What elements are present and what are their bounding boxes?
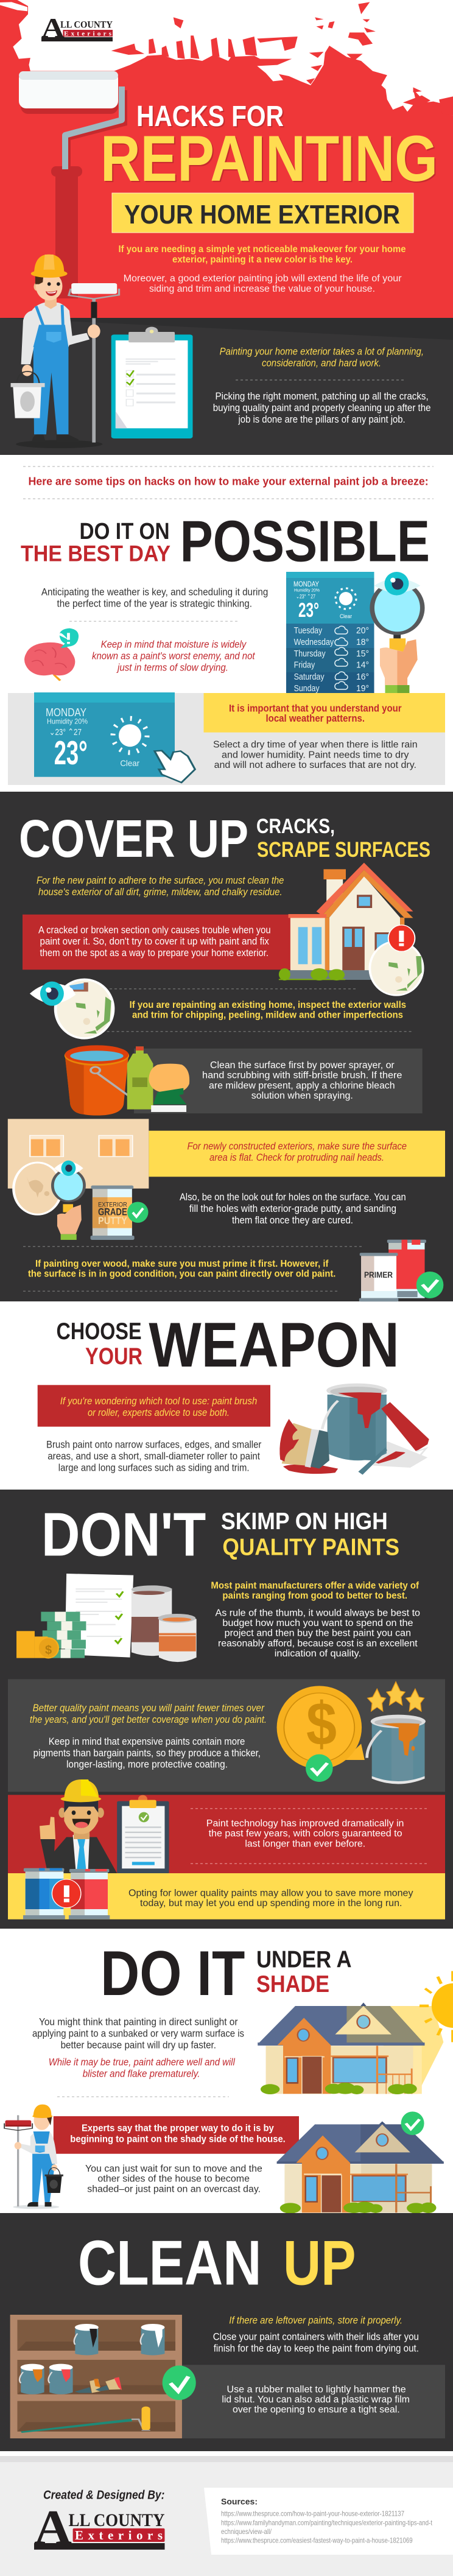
intro text [118, 244, 406, 294]
panel: lower quality [8, 1868, 445, 1920]
leftover text [213, 2315, 419, 2354]
moisture callout [92, 639, 256, 674]
logo: All County Exteriors [41, 12, 113, 43]
sources: https://www.thespruce.com/how-to-paint-your-house-exterior-1821137 [221, 2510, 404, 2518]
sources: https://www.thespruce.com/easiest-fastest-way-to-paint-a-house-1821069 [221, 2536, 413, 2544]
manager with clipboard [40, 1779, 169, 1874]
moisture callout: known as a paint's worst enemy, and not [92, 650, 256, 661]
title: HACKS FOR [136, 100, 284, 133]
clean text: For the new paint to adhere to the surface, you must clean the [37, 875, 284, 886]
holes text: fill the holes with exterior-grade putty, and sanding [189, 1203, 396, 1214]
heading: do it under a shade: SHADE [256, 1971, 329, 1997]
weather app card: 16° [356, 672, 369, 682]
logo large: LL COUNTY [68, 2510, 165, 2530]
holes text: them flat once they are cured. [232, 1215, 353, 1226]
cleaning supplies [65, 1045, 189, 1116]
weather app card: 23° [298, 599, 319, 621]
red callout: shady side: Experts say that the proper way to do it is by [82, 2123, 274, 2133]
shady text [85, 2164, 262, 2194]
yellow callout: new exteriors: For newly constructed exteriors, make sure the surface [188, 1141, 407, 1152]
intro text: Moreover, a good exterior painting job will extend the life of your [124, 273, 402, 284]
logo: All County Exteriors: LL COUNTY [60, 20, 113, 30]
weather app card: 19° [356, 683, 369, 694]
panel: better quality: Better quality paint means you will paint fewer times over [33, 1703, 265, 1714]
planning text: consideration, and hard work. [262, 357, 381, 369]
brush text: Brush paint onto narrow surfaces, edges, and smaller [46, 1440, 262, 1451]
created by: Created & Designed By: [43, 2488, 164, 2502]
putty can label: EXTERIOR [98, 1202, 127, 1209]
weather card large: 23° [54, 734, 88, 772]
paint storage shelf [10, 2315, 196, 2438]
panel: mallet [182, 2365, 445, 2438]
callout: local weather: It is important that you understand your [229, 703, 402, 714]
heading: choose your weapon [56, 1310, 399, 1381]
red callout: cracked section: A cracked or broken section only causes trouble when you [38, 924, 271, 935]
red callout: shady side [54, 2116, 299, 2154]
logo large: A [34, 2501, 72, 2555]
panel: clean surface: hand scrubbing with stiff-bristle brush. If there [202, 1071, 402, 1081]
eye with wall detail [30, 979, 113, 1038]
moisture callout: just in terms of slow drying. [116, 663, 228, 674]
paint can, brush and roller [279, 1384, 429, 1475]
yellow callout: new exteriors [149, 1131, 445, 1177]
heading: don't skimp: QUALITY PAINTS [222, 1534, 399, 1560]
planning text [213, 346, 431, 425]
weather card large: MONDAY [46, 706, 86, 719]
weather app card: 18° [356, 637, 369, 647]
brush text: large and long surfaces such as siding and trim. [58, 1463, 250, 1474]
panel: weather patterns [8, 692, 445, 785]
sunlight text: blister and flake prematurely. [83, 2068, 200, 2079]
dry time text: and lower humidity. Paint needs time to dry [222, 750, 409, 760]
weather app card: Sunday [294, 683, 320, 694]
red callout: cracked section [23, 915, 290, 970]
white paint strokes [0, 0, 453, 116]
panel: better quality: the years, and you'll get better coverage when you do paint. [30, 1714, 267, 1725]
heading: do it under a shade [100, 1938, 352, 2009]
wall with putty [8, 1119, 149, 1240]
leftover text: If there are leftover paints, store it properly. [229, 2315, 402, 2326]
panel: lower quality: today, but may let you end up spending more in the long run. [140, 1898, 402, 1909]
section: don't skimp: $ [45, 1644, 52, 1657]
heading: cover up cracks: COVER UP [19, 809, 248, 868]
primer text: the surface is in in good condition, you can paint directly over old paint. [28, 1269, 335, 1279]
weather app card: Clear [340, 613, 352, 620]
planning text: job is done are the pillars of any paint job. [238, 413, 406, 425]
paints variety text: As rule of the thumb, it would always be best to [216, 1608, 420, 1618]
panel: paint technology: last longer than ever before. [245, 1839, 365, 1849]
weather app card: 14° [356, 660, 369, 670]
paints variety text: project and then buy the best paint you can [225, 1628, 411, 1639]
dry time text: and will not adhere to surfaces that are not dry. [214, 760, 416, 770]
putty can label [98, 1202, 127, 1226]
panel: better quality: Keep in mind that expensive paints contain more [49, 1736, 245, 1747]
panel: better quality: longer-lasting, more protective coating. [66, 1759, 228, 1770]
footer [0, 2456, 453, 2576]
panel: clean surface: are mildew present, apply a chlorine bleach [209, 1080, 395, 1091]
heading: do it under a shade: DO IT [100, 1938, 245, 2009]
heading: cover up cracks: CRACKS, [256, 815, 335, 838]
putty can label: GRADE [98, 1206, 127, 1218]
icon: pointer hand [155, 751, 195, 783]
sources: echniques/view-all/ [221, 2527, 272, 2536]
heading: don't skimp [41, 1501, 399, 1569]
red callout: shady side: beginning to paint on the shady side of the house. [70, 2134, 286, 2145]
leftover text: finish for the day to keep the paint from drying out. [214, 2343, 419, 2354]
planning text: buying quality paint and properly cleaning up after the [213, 402, 431, 413]
putty can label: PUTTY [98, 1215, 127, 1226]
weather card large [34, 692, 175, 777]
paint roller [19, 71, 124, 298]
panel: mallet: Use a rubber mallet to lightly hammer the [226, 2384, 406, 2395]
icon: brain [24, 628, 79, 681]
paints variety text: paints ranging from good to better to best. [222, 1591, 407, 1601]
intro text: If you are needing a simple yet noticeable makeover for your home [118, 244, 406, 255]
red callout: which tool: If you're wondering which tool to use: paint brush [60, 1396, 257, 1407]
paints variety text: Most paint manufacturers offer a wide variety of [211, 1580, 420, 1591]
heading: don't skimp: DON'T [41, 1501, 206, 1569]
heading: clean up: CLEAN [78, 2228, 261, 2299]
magnifying glass with eye [372, 572, 423, 694]
panel: clean surface: solution when spraying. [251, 1091, 353, 1101]
moisture callout: Keep in mind that moisture is widely [101, 639, 247, 650]
weather app card: Friday [294, 660, 315, 670]
holes text [180, 1192, 406, 1226]
weather app card: Tuesday [294, 625, 323, 636]
paints variety text: indication of quality. [275, 1649, 361, 1659]
weather app card: ⌄23° ⌃27 [296, 594, 315, 600]
blue and red cans with alert [23, 1868, 110, 1920]
sunlight text: While it may be true, paint adhere well and will [49, 2057, 236, 2067]
holes text: Also, be on the look out for holes on the surface. You can [180, 1192, 406, 1203]
heading: do it on the best day possible: THE BEST DAY [21, 541, 170, 566]
callout: local weather: local weather patterns. [265, 713, 365, 724]
sunlit house [258, 1971, 453, 2094]
planning text: Painting your home exterior takes a lot of planning, [220, 346, 424, 357]
paints variety text [211, 1580, 420, 1659]
shady text: other sides of the house to become [97, 2174, 250, 2184]
sunlight text: better because paint will dry up faster. [61, 2040, 216, 2051]
sunlight text: You might think that painting in direct sunlight or [39, 2017, 238, 2028]
section: don't skimp [0, 1490, 453, 1929]
heading: don't skimp: SKIMP ON HIGH [221, 1508, 388, 1535]
panel: mallet: over the opening to ensure a tight seal. [233, 2405, 400, 2415]
logo large: Exteriors [75, 2528, 163, 2543]
house illustration [279, 863, 413, 980]
heading: choose your weapon: YOUR [85, 1343, 142, 1370]
heading: choose your weapon: WEAPON [149, 1310, 399, 1381]
section: clean up [0, 2213, 453, 2451]
hero panel [0, 0, 453, 318]
heading: cover up cracks [19, 809, 430, 868]
panel: clean surface [134, 1049, 423, 1113]
tips intro: Here are some tips on hacks on how to make your external paint job a breeze: [28, 476, 429, 488]
intro dark panel [0, 255, 453, 455]
gold coin with stars and check [277, 1682, 424, 1782]
brush text [46, 1440, 262, 1474]
title: YOUR HOME EXTERIOR [124, 200, 400, 230]
panel: paint technology: the past few years, with colors guaranteed to [209, 1829, 402, 1839]
weather app card: MONDAY [293, 580, 319, 588]
shady text: shaded–or just paint on an overcast day. [87, 2184, 261, 2194]
heading: clean up: UP [283, 2228, 356, 2299]
panel: lower quality: Opting for lower quality paints may allow you to save more money [128, 1888, 413, 1898]
panel: paint technology: Paint technology has improved dramatically in [206, 1818, 404, 1829]
weather text [41, 587, 268, 621]
clipboard [111, 327, 192, 438]
weather text: Anticipating the weather is key, and scheduling it during [41, 587, 268, 598]
paints variety text: budget how much you want to spend on the [222, 1618, 413, 1628]
logo: All County Exteriors: A [41, 12, 65, 43]
panel: better quality: $ [306, 1690, 337, 1758]
leftover text: Close your paint containers with their lids after you [213, 2331, 419, 2342]
inspect text [130, 1000, 406, 1021]
weather card large: ⌄23° ⌃27 [49, 727, 82, 737]
weather app card: Thursday [294, 649, 326, 659]
shaded house [277, 2111, 444, 2214]
yellow callout: new exteriors: area is flat. Check for protruding nail heads. [209, 1152, 384, 1163]
clean text [37, 875, 284, 898]
shady text: You can just wait for sun to move and the [85, 2164, 262, 2174]
red callout: cracked section: them on the spot as a way to prepare your home exterior. [40, 948, 269, 959]
section: cover up [0, 792, 453, 1301]
panel: clean surface: Clean the surface first by power sprayer, or [210, 1060, 395, 1071]
red callout: cracked section: paint over it. So, don't try to cover it up with paint and fix [40, 936, 269, 947]
panel: mallet: lid shut. You can also add a plastic wrap film [222, 2395, 410, 2405]
intro text: exterior, painting it a new color is the key. [172, 255, 353, 265]
weather app card [286, 572, 374, 694]
heading: do it on the best day possible [21, 509, 430, 574]
heading: choose your weapon: CHOOSE [56, 1318, 141, 1345]
red callout: which tool: or roller, experts advice to use both. [88, 1407, 230, 1418]
primer text: If painting over wood, make sure you must prime it first. However, if [35, 1259, 329, 1269]
panel: paint technology [8, 1779, 445, 1874]
inspect text: If you are repainting an existing home, inspect the exterior walls [130, 1000, 406, 1010]
primer label: PRIMER [364, 1270, 393, 1279]
inspection magnifier with alert [370, 925, 423, 995]
weather app card: Humidity 20% [294, 588, 320, 593]
painter figure [11, 255, 119, 448]
red callout: which tool [38, 1385, 270, 1427]
dry time text: Select a dry time of year when there is little rain [213, 740, 418, 750]
brush text: areas, and use a short, small-diameter roller to paint [47, 1451, 260, 1462]
small painter [4, 2105, 63, 2209]
heading: do it under a shade: UNDER A [256, 1947, 352, 1973]
logo: All County Exteriors: Exteriors [64, 30, 112, 38]
weather app card: Saturday [294, 672, 325, 682]
icon: check [127, 1202, 149, 1223]
sources: Sources: [221, 2497, 258, 2507]
panel: better quality: pigments than bargain paints, so they produce a thicker, [33, 1748, 261, 1759]
paints variety text: reasonably afford, because cost is an excellent [218, 1638, 418, 1649]
weather card large: Clear [120, 758, 139, 768]
primer cans [359, 1240, 443, 1301]
intro text: siding and trim and increase the value of your house. [149, 284, 375, 294]
dry time text [213, 740, 418, 770]
logo large [34, 2501, 165, 2555]
weather text: the perfect time of the year is strategic thinking. [57, 599, 252, 610]
orange paint can [367, 1715, 426, 1784]
sources [204, 2488, 453, 2555]
callout: local weather [203, 693, 445, 733]
panel: better quality [8, 1679, 445, 1792]
primer text [28, 1259, 335, 1279]
weather app card: 15° [356, 649, 369, 659]
sunlight text: applying paint to a sunbaked or very warm surface is [32, 2029, 244, 2039]
money, checklist and cans [16, 1574, 197, 1662]
inspect text: and trim for chipping, peeling, mildew and other imperfections [132, 1010, 403, 1021]
heading: do it on the best day possible: DO IT ON [79, 519, 169, 544]
weather app card: Wednesday [294, 637, 334, 647]
sunlight text [32, 2017, 244, 2079]
title [100, 100, 438, 233]
weather card large: Humidity 20% [47, 717, 88, 726]
weather app card: 20° [356, 625, 369, 636]
clean text: house's exterior of all dirt, grime, mildew, and chalky residue. [38, 887, 283, 898]
planning text: Picking the right moment, patching up all the cracks, [216, 390, 429, 402]
